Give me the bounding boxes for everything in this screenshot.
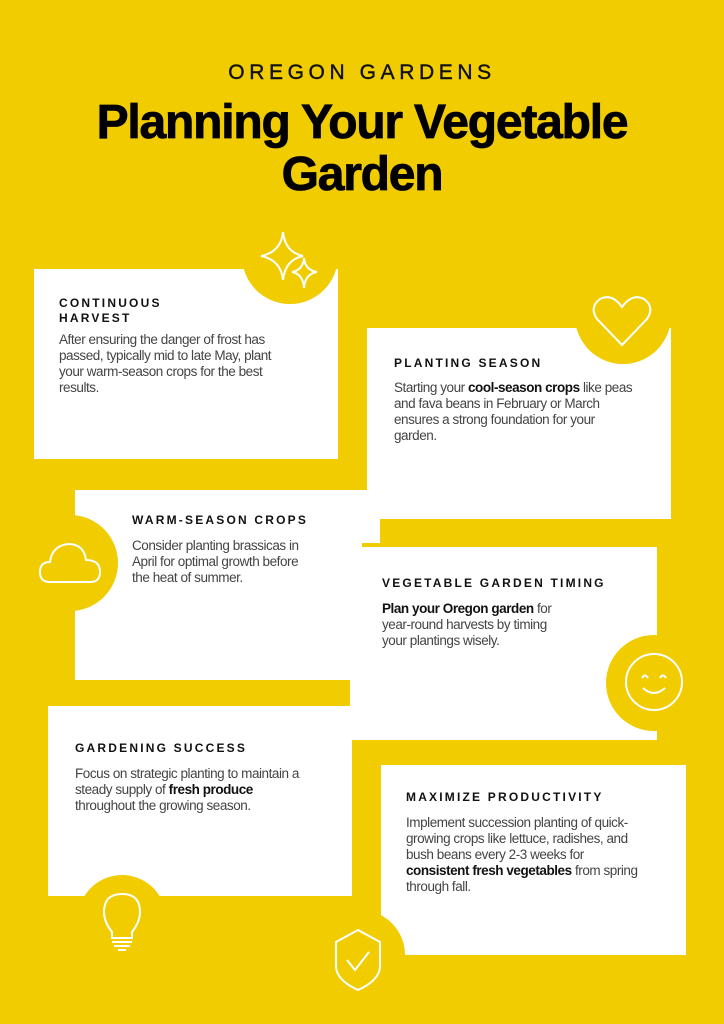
panel: vegetable garden timing: your plantings wisely. [382,633,499,648]
icon: smiley [625,653,683,711]
panel: gardening success: Focus on strategic planting to maintain a [75,766,299,781]
panel: warm-season crops: Consider planting brassicas in [132,538,299,553]
panel: continuous harvest: your warm-season crops for the best [59,364,262,379]
panel: gardening success: steady supply of fresh produce [75,782,253,797]
icon: heart [592,296,652,346]
panel: continuous harvest: HARVEST [59,311,132,325]
panel: continuous harvest: CONTINUOUS [59,296,162,310]
panel: maximize productivity: consistent fresh vegetables from spring [406,863,638,878]
panel: planting season: PLANTING SEASON [394,356,542,370]
title: Planning Your Vegetable [97,96,627,149]
panel: maximize productivity: through fall. [406,879,471,894]
icon: lightbulb [103,893,141,951]
icon: shield check [335,928,381,992]
panel: gardening success: throughout the growing season. [75,798,251,813]
panel: warm-season crops: the heat of summer. [132,570,243,585]
panel: planting season: Starting your cool-season crops like peas [394,380,632,395]
icon: sparkles [260,232,318,288]
panel: maximize productivity: Implement succession planting of quick- [406,815,628,830]
panel: planting season: and fava beans in February or March [394,396,600,411]
brand: OREGON GARDENS [228,61,496,84]
panel: vegetable garden timing: Plan your Oregon garden for [382,601,551,616]
panel: gardening success: GARDENING SUCCESS [75,741,247,755]
panel: maximize productivity: MAXIMIZE PRODUCTIVITY [406,790,604,804]
title: Garden [282,148,442,201]
panel: maximize productivity: bush beans every 2-3 weeks for [406,847,584,862]
panel: continuous harvest: passed, typically mid to late May, plant [59,348,271,363]
icon: cloud [39,543,101,583]
panel: planting season: garden. [394,428,437,443]
panel: vegetable garden timing: year-round harvests by timing [382,617,547,632]
panel: warm-season crops [75,490,362,680]
panel: planting season: ensures a strong foundation for your [394,412,595,427]
panel: continuous harvest: After ensuring the danger of frost has [59,332,265,347]
title [97,96,628,201]
panel: vegetable garden timing: VEGETABLE GARDEN TIMING [382,576,606,590]
panel: continuous harvest [34,269,338,459]
panel: vegetable garden timing [350,547,657,740]
panel: maximize productivity: growing crops like lettuce, radishes, and [406,831,628,846]
panel: gardening success [48,706,352,896]
panel: continuous harvest: results. [59,380,99,395]
panel: warm-season crops: April for optimal growth before [132,554,298,569]
panel: warm-season crops: WARM-SEASON CROPS [132,513,308,527]
panel: maximize productivity [381,765,686,955]
panel: planting season [367,328,671,519]
